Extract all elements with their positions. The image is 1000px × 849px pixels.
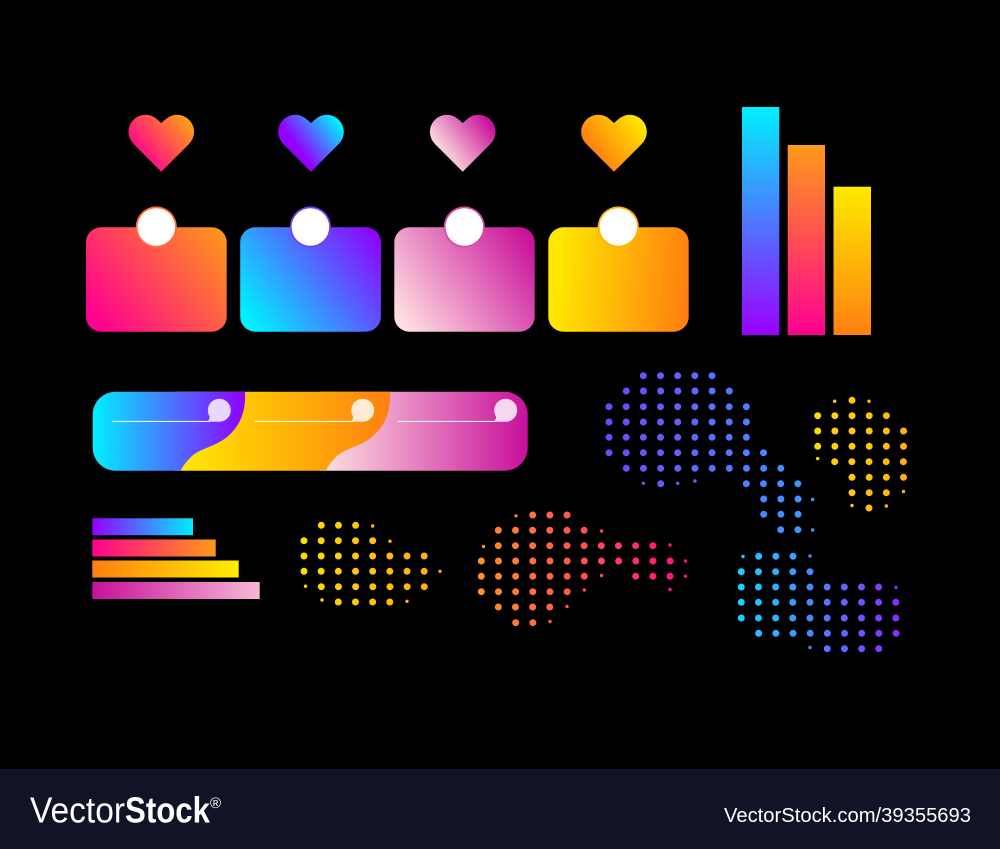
footer bar: [0, 769, 1000, 849]
three-part wave banner: [93, 392, 528, 471]
bar: pink orange: [92, 540, 216, 556]
footer logo: [30, 790, 221, 831]
horizontal bar chart: [92, 518, 260, 599]
vertical bar chart: [742, 107, 871, 335]
icon: pink orange heart: [129, 115, 194, 172]
dot blob: yellow left: [304, 525, 440, 602]
bar: short yellow orange: [834, 187, 871, 335]
callout marker 3: [398, 399, 517, 422]
dot blob: cyan purple: [741, 556, 896, 649]
bar: tall cyan purple: [742, 107, 779, 335]
bar: purple cyan: [92, 518, 193, 535]
banner segment: yellow orange: [175, 392, 390, 471]
card: pink orange: [86, 206, 227, 332]
dot blob: yellow right: [818, 400, 904, 508]
banner segment: cyan purple: [93, 392, 245, 471]
bar: orange yellow: [92, 560, 239, 578]
card: pale pink magenta: [394, 206, 535, 332]
card: yellow orange: [548, 206, 689, 332]
heart icons row: [129, 115, 647, 172]
icon: purple cyan heart: [278, 115, 344, 172]
logo word: Vector: Vector: [30, 790, 125, 831]
bar: medium orange pink: [788, 145, 825, 335]
banner segment: magenta: [320, 392, 528, 471]
dot blob: blue purple: [609, 376, 814, 530]
bar: magenta pink: [92, 582, 260, 599]
cards row: [86, 206, 689, 332]
card: cyan purple: [240, 206, 381, 332]
logo word: Stock: Stock: [125, 790, 211, 831]
logo registered mark: ®: [210, 795, 221, 812]
icon: orange yellow heart: [581, 115, 647, 172]
dot blob: orange pink: [481, 515, 686, 623]
footer image id: VectorStock.com/39355693: [724, 805, 971, 827]
callout marker 1: [112, 399, 231, 422]
icon: pale magenta heart: [430, 115, 496, 172]
callout marker 2: [255, 399, 374, 422]
